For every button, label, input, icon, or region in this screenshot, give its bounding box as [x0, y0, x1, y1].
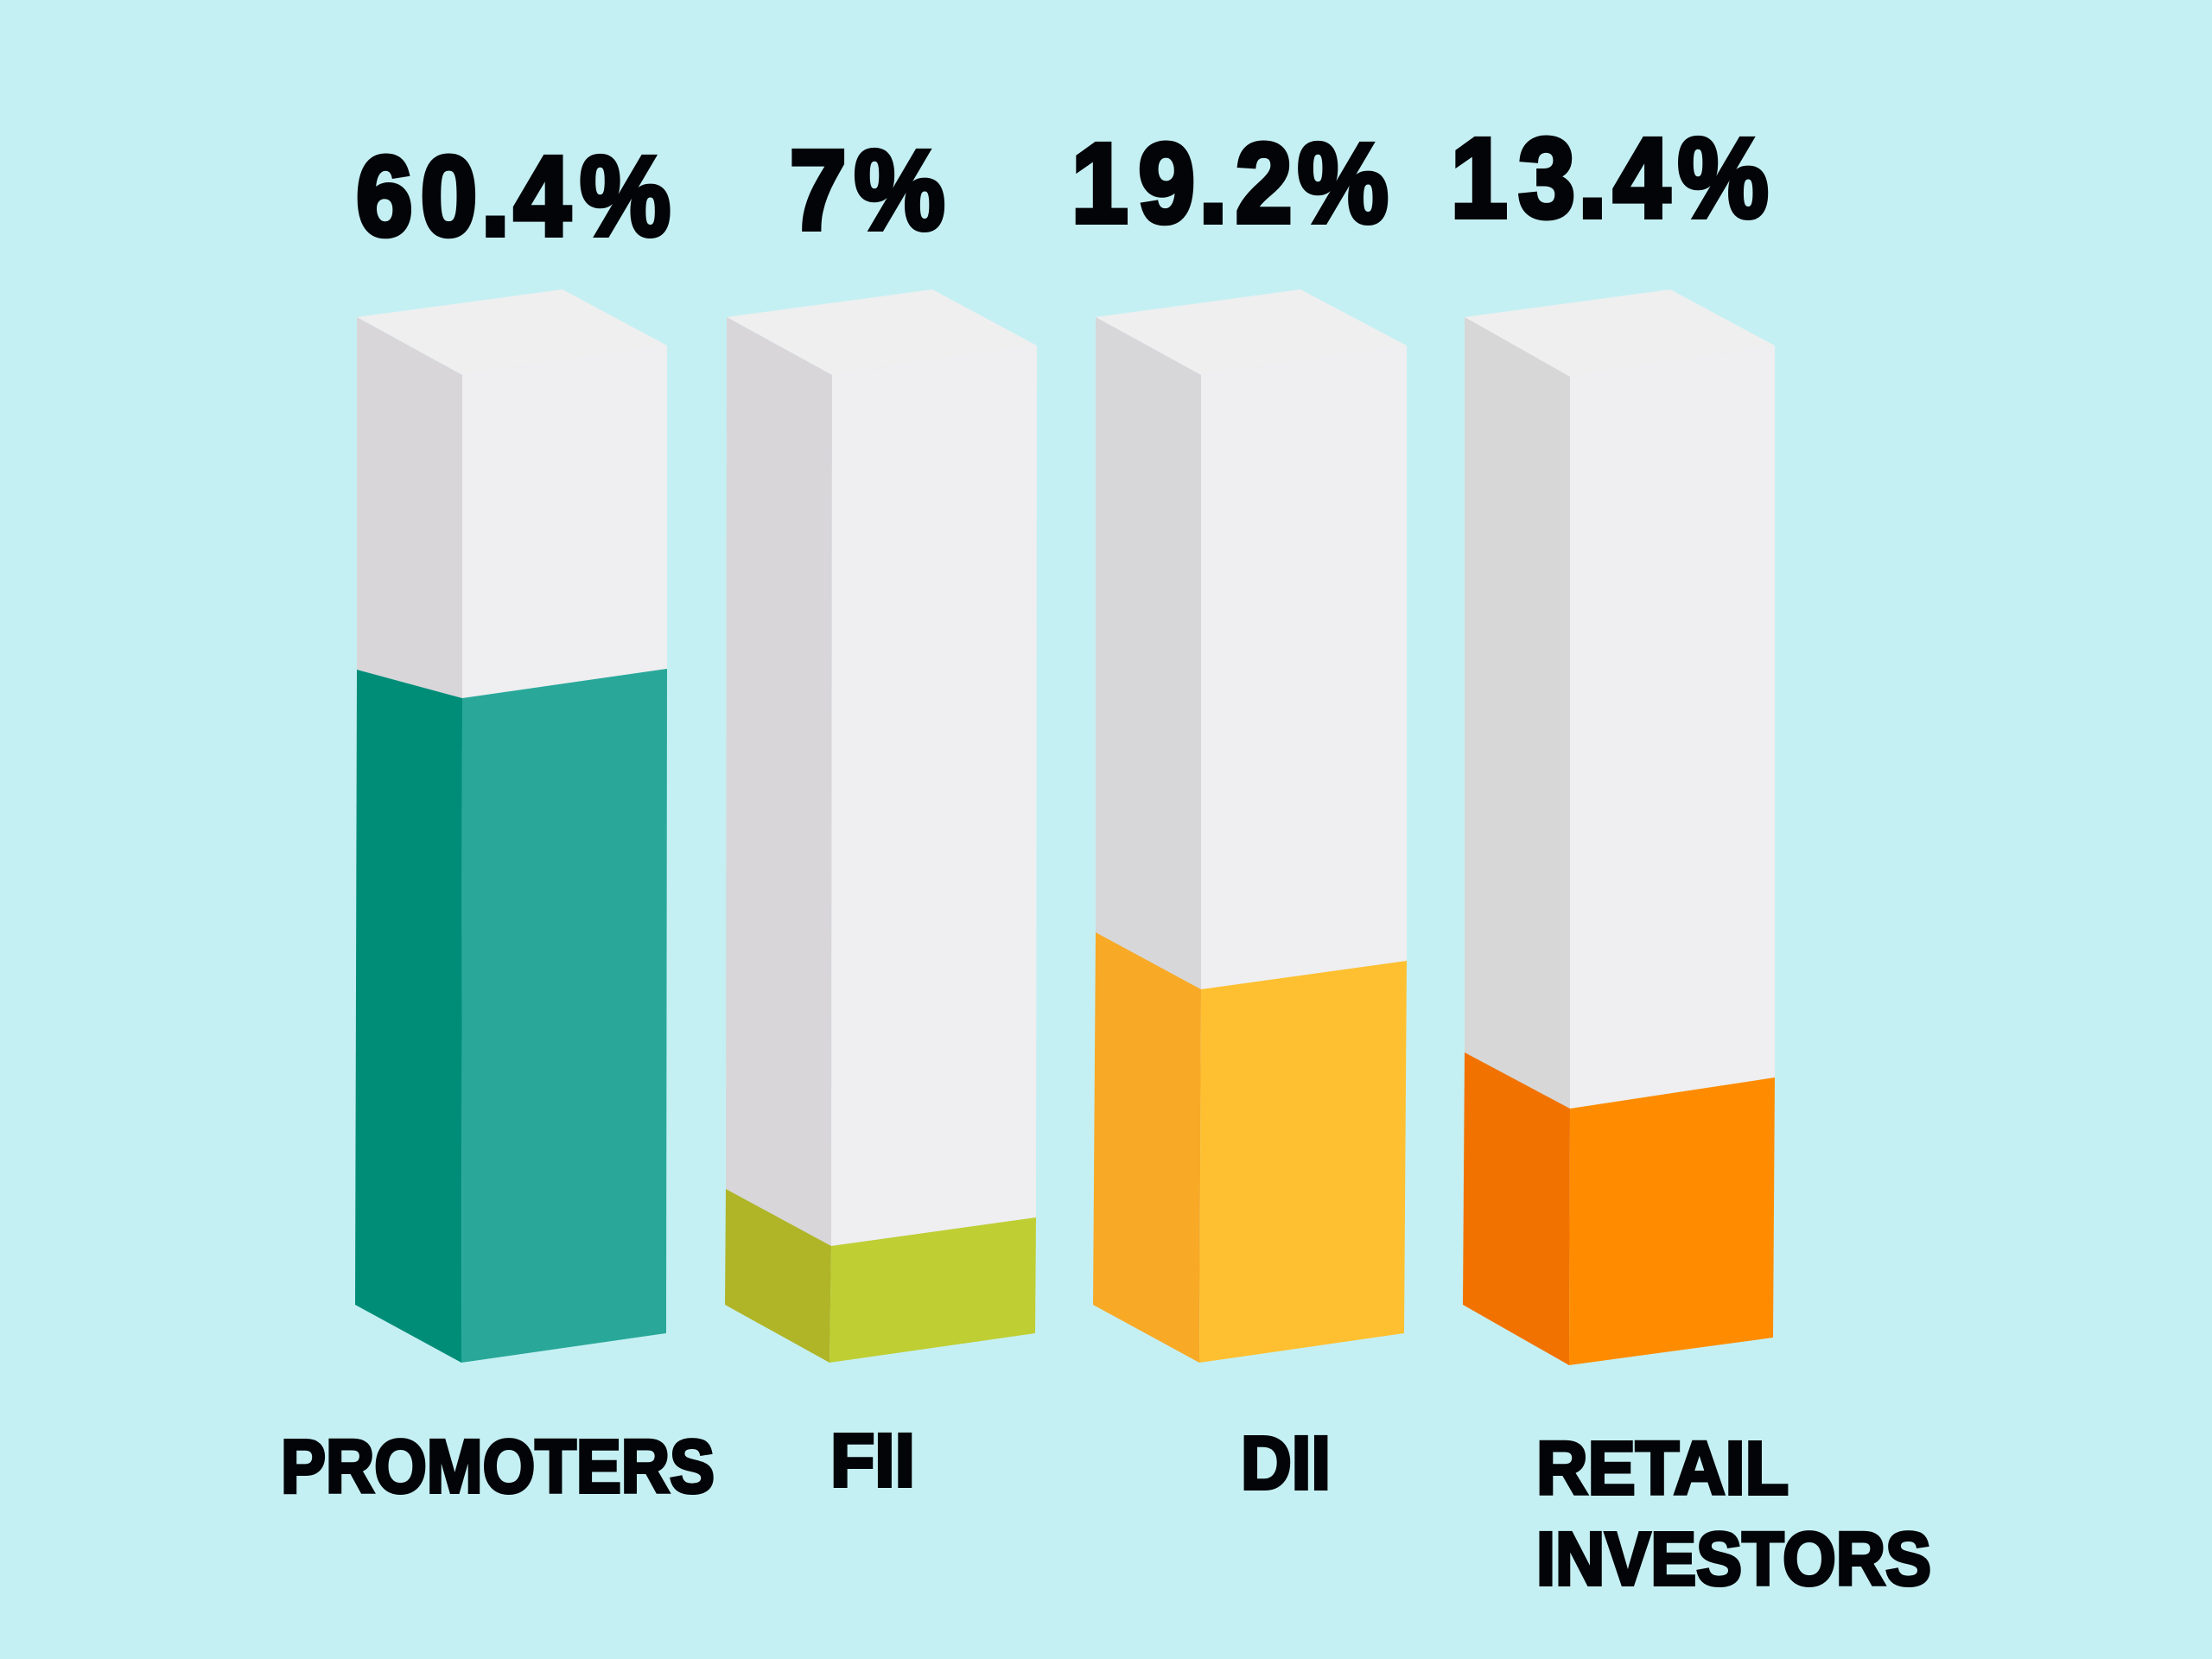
bar: DII: [1093, 289, 1407, 1363]
value: retail investors 13.4%: 13.4%: [1451, 115, 1769, 241]
label: FII: FII: [830, 1419, 915, 1503]
label: DII: DII: [1241, 1421, 1331, 1505]
label: promoters: PROMOTERS: [281, 1425, 715, 1509]
label: retail investors: RETAIL: [1536, 1427, 1789, 1510]
bar: FII: [725, 289, 1037, 1363]
value: DII 19.2%: 19.2%: [1071, 120, 1389, 246]
bar: promoters: [355, 289, 667, 1363]
bar: retail investors: [1463, 289, 1775, 1365]
label: retail investors: INVESTORS: [1536, 1517, 1931, 1601]
value: FII 7%: 7%: [790, 127, 945, 253]
value: promoters 60.4%: 60.4%: [356, 133, 671, 259]
label: retail investors: [1536, 1427, 1931, 1601]
